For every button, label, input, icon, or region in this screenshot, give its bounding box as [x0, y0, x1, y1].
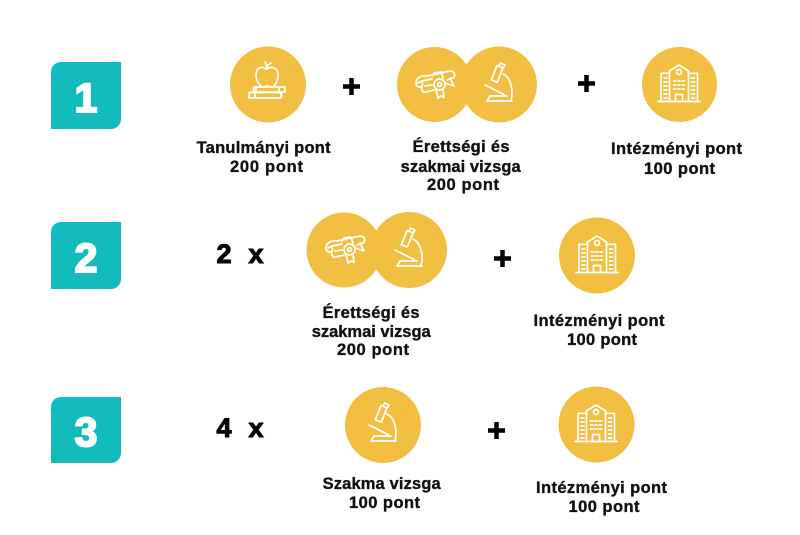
row 2: [51, 212, 669, 359]
plus: [494, 250, 511, 267]
badge: 3: 3: [75, 409, 97, 455]
label: Érettségi és szakmai vizsga: szakmai vizsga: [401, 158, 521, 176]
label: Érettségi és szakmai vizsga: Érettségi és: [323, 303, 420, 322]
label: Intézményi pont: Intézményi pont: [611, 140, 743, 158]
label: Intézményi pont: Intézményi pont: [536, 479, 668, 497]
label: Szakma vizsga: Szakma vizsga: [323, 475, 441, 493]
multiplier: 2 x: 2 x: [216, 239, 264, 269]
row 1: [51, 46, 747, 194]
label: Érettségi és szakmai vizsga: 200 pont: [337, 341, 410, 359]
multiplier: 4 x: 4 x: [216, 413, 264, 443]
label: Szakma vizsga: 100 pont: [349, 494, 420, 512]
icons: diploma and microscope: [397, 46, 537, 122]
label: Intézményi pont: 100 pont: [568, 498, 640, 516]
plus: [343, 78, 360, 95]
label: Érettségi és szakmai vizsga: 200 pont: [427, 176, 500, 194]
icons: diploma and microscope: [306, 212, 447, 288]
label: Intézményi pont: Intézményi pont: [534, 312, 665, 330]
row 3: [51, 386, 672, 516]
badge: 1: 1: [75, 75, 97, 121]
badge: 1: [51, 62, 121, 129]
plus: [488, 422, 505, 439]
icon: building: [642, 47, 717, 122]
label: Tanulmányi pont: 200 pont: [230, 158, 304, 176]
plus: [578, 75, 595, 92]
badge: 2: 2: [75, 235, 97, 281]
icon: building: [559, 218, 635, 294]
label: Érettségi és szakmai vizsga: szakmai vizsga: [312, 323, 432, 341]
label: Intézményi pont: 100 pont: [644, 160, 716, 178]
label: Tanulmányi pont: Tanulmányi pont: [197, 139, 331, 157]
label: Intézményi pont: 100 pont: [567, 331, 638, 349]
label: Érettségi és szakmai vizsga: Érettségi és: [413, 137, 510, 156]
icon: building: [558, 386, 634, 462]
icon: microscope: [345, 387, 421, 463]
badge: 3: [51, 397, 121, 463]
icon: apple on books: [230, 46, 306, 122]
badge: 2: [51, 222, 121, 289]
